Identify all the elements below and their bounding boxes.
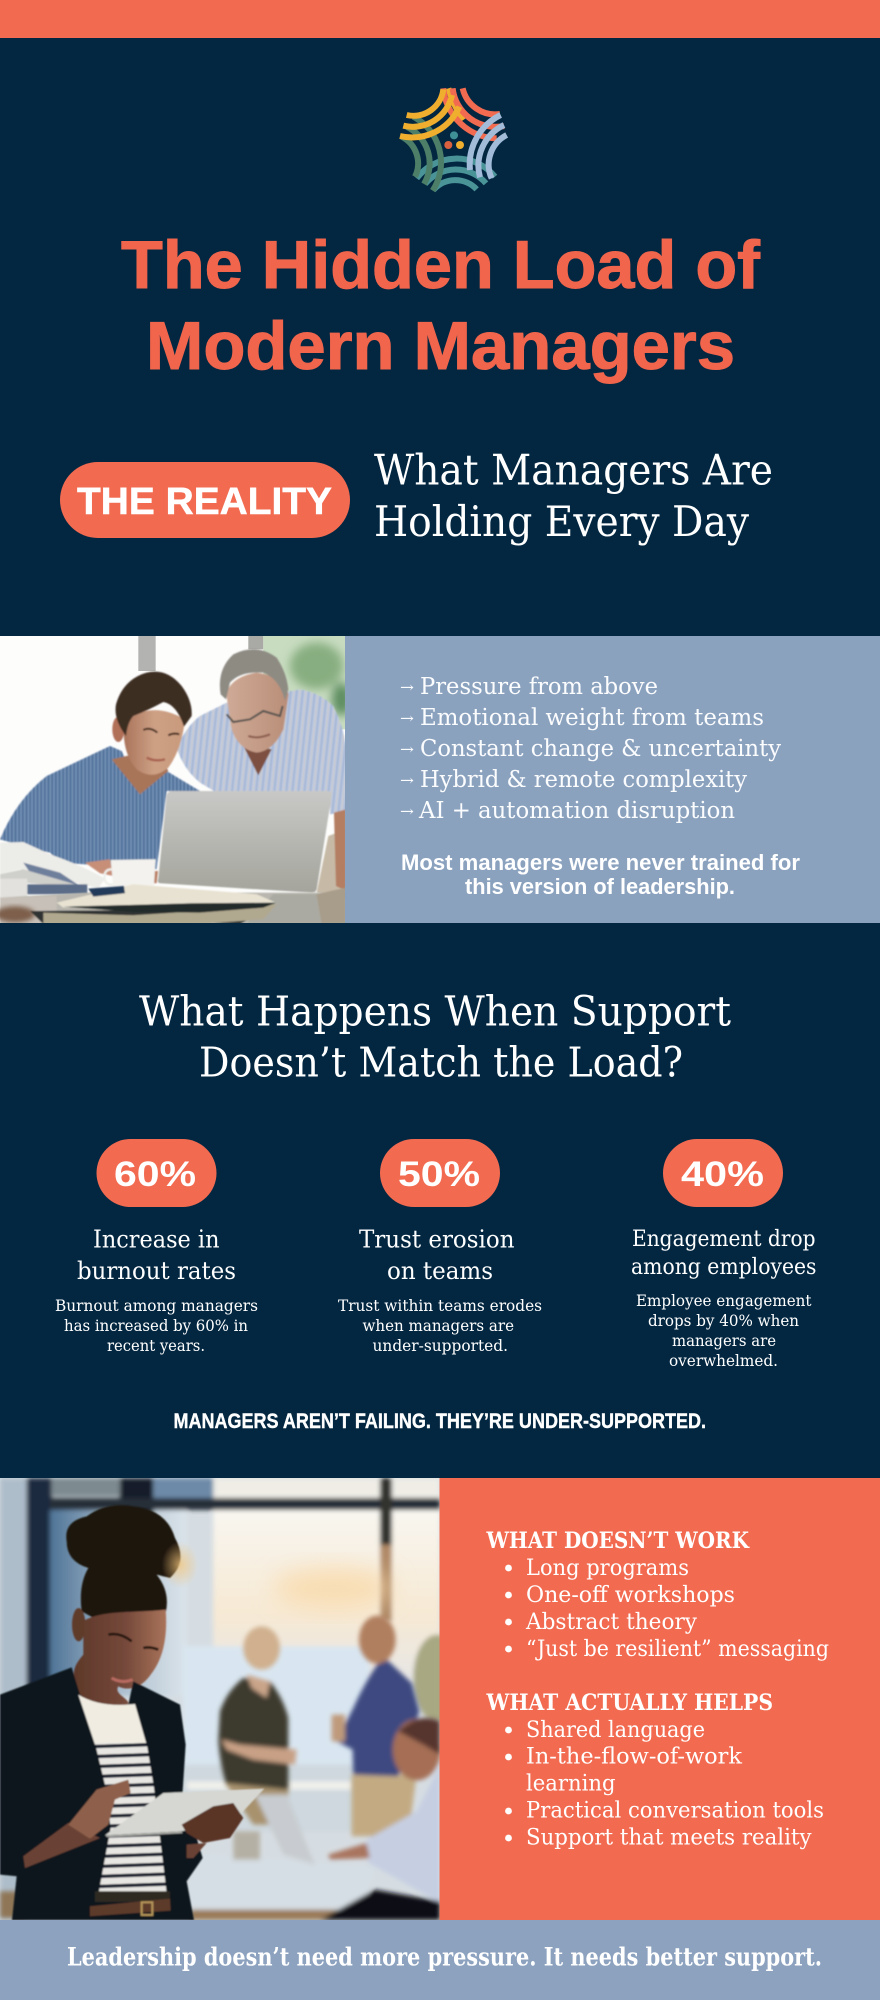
- stat: 60% burnout: has increased by 60% in: [64, 1316, 248, 1335]
- panel: what managers carry: [345, 636, 880, 923]
- stat: 50% trust: 50%: [398, 1155, 480, 1194]
- list: what actually helps: WHAT ACTUALLY HELPS: [486, 1690, 773, 1716]
- heading: what happens when support: Doesn’t Match the Load?: [199, 1038, 683, 1086]
- tablet: [105, 1789, 264, 1835]
- stat: 50% trust: [338, 1139, 542, 1355]
- face and neck: [72, 1608, 85, 1641]
- stat: 50% trust: under-supported.: [372, 1336, 508, 1355]
- background blur group: [0, 1478, 460, 1920]
- heading: what happens when support: [139, 988, 731, 1086]
- stat: 50% trust: Trust erosion: [359, 1226, 514, 1254]
- main woman: hair: [66, 1505, 181, 1620]
- list: what actually helps: Shared language: [526, 1718, 705, 1743]
- list: daily pressures: →: [400, 773, 414, 789]
- table: [0, 884, 346, 924]
- list: what doesn't work: Abstract theory: [525, 1610, 698, 1635]
- list: daily pressures: →: [400, 742, 414, 758]
- older man: [177, 689, 346, 814]
- footer banner: [0, 1920, 880, 2000]
- stat: 40% engagement: 40%: [681, 1155, 764, 1194]
- standing woman blurred: [218, 1678, 288, 1793]
- list: daily pressures: →: [400, 804, 414, 820]
- stat: 60% burnout: recent years.: [107, 1336, 205, 1355]
- stat: 50% trust: when managers are: [362, 1316, 514, 1335]
- list: what doesn't work: Long programs: [526, 1556, 689, 1581]
- title: Modern Managers: [146, 308, 735, 384]
- heading: what happens when support: What Happens When Support: [139, 988, 731, 1036]
- stat: 40% engagement: managers are: [672, 1331, 776, 1350]
- list: what actually helps: In-the-flow-of-work: [526, 1744, 743, 1770]
- pill: the reality: [60, 462, 350, 538]
- list: what actually helps: Support that meets reality: [526, 1826, 812, 1850]
- stat: 60% burnout: Burnout among managers: [55, 1296, 258, 1315]
- stat: 60% burnout: burnout rates: [77, 1257, 236, 1285]
- photo: woman using a tablet in an office: [0, 1478, 460, 1920]
- jacket: [0, 1667, 203, 1920]
- heading: what managers are holding: Holding Every Day: [374, 497, 749, 546]
- list: what actually helps: [486, 1690, 824, 1850]
- list: what doesn't work: WHAT DOESN’T WORK: [486, 1528, 750, 1554]
- callout: never trained: this version of leadership.: [465, 874, 735, 899]
- list: daily pressures: Emotional weight from teams: [420, 705, 764, 731]
- laptop: [158, 791, 332, 893]
- stat: 50% trust: Trust within teams erodes: [338, 1296, 542, 1315]
- list: what doesn't work: [486, 1528, 829, 1662]
- list: daily pressures: Hybrid & remote complexity: [420, 767, 747, 793]
- stat: 40% engagement: overwhelmed.: [669, 1351, 778, 1370]
- photo: two men at a laptop: [0, 636, 352, 924]
- panel: what works and what doesn't: [440, 1478, 880, 1920]
- heading: what managers are holding: [374, 446, 773, 546]
- belt: [95, 1891, 170, 1902]
- list: what actually helps: learning: [526, 1772, 616, 1796]
- stat: 40% engagement: among employees: [631, 1255, 816, 1280]
- callout: never trained: [401, 850, 800, 899]
- table and laptop blurred: [187, 1851, 377, 1915]
- list: daily pressures: →: [400, 711, 414, 727]
- younger man: [0, 746, 200, 869]
- pill: the reality: THE REALITY: [77, 481, 332, 523]
- top accent bar: [0, 0, 880, 38]
- stat: 50% trust: on teams: [387, 1257, 493, 1285]
- standing man blurred: [352, 1775, 417, 1836]
- stat: 40% engagement: Engagement drop: [632, 1227, 816, 1252]
- list: daily pressures: [400, 674, 781, 824]
- stat: 60% burnout: Increase in: [93, 1226, 220, 1254]
- title: The Hidden Load of: [121, 227, 760, 303]
- callout: never trained: Most managers were never trained for: [401, 850, 800, 875]
- seated man blurred: [367, 1765, 440, 1903]
- list: what actually helps: Practical conversation tools: [526, 1798, 824, 1824]
- tops: [78, 1695, 147, 1745]
- hand and cup: [85, 859, 113, 876]
- list: daily pressures: AI + automation disruption: [418, 798, 735, 824]
- left arm and hand: [23, 1823, 100, 1868]
- books: [0, 842, 105, 888]
- callout: managers aren't failing: MANAGERS AREN’T FAILING. THEY’RE UNDER-SUPPORTED.: [174, 1410, 706, 1433]
- stat: 60% burnout: [55, 1139, 258, 1355]
- list: what doesn't work: One-off workshops: [526, 1583, 735, 1608]
- list: what doesn't work: “Just be resilient” messaging: [526, 1637, 829, 1662]
- heading: what managers are holding: What Managers Are: [374, 446, 773, 494]
- list: daily pressures: Constant change & uncertainty: [420, 736, 781, 762]
- stat: 60% burnout: 60%: [114, 1155, 196, 1194]
- stat: 40% engagement: [631, 1139, 816, 1370]
- stat: 40% engagement: Employee engagement: [636, 1291, 812, 1310]
- title: [121, 227, 760, 384]
- right hand: [182, 1803, 243, 1843]
- stat: 40% engagement: drops by 40% when: [648, 1311, 799, 1330]
- list: daily pressures: →: [400, 680, 414, 696]
- list: daily pressures: Pressure from above: [420, 674, 658, 700]
- icon: logo: [400, 88, 507, 191]
